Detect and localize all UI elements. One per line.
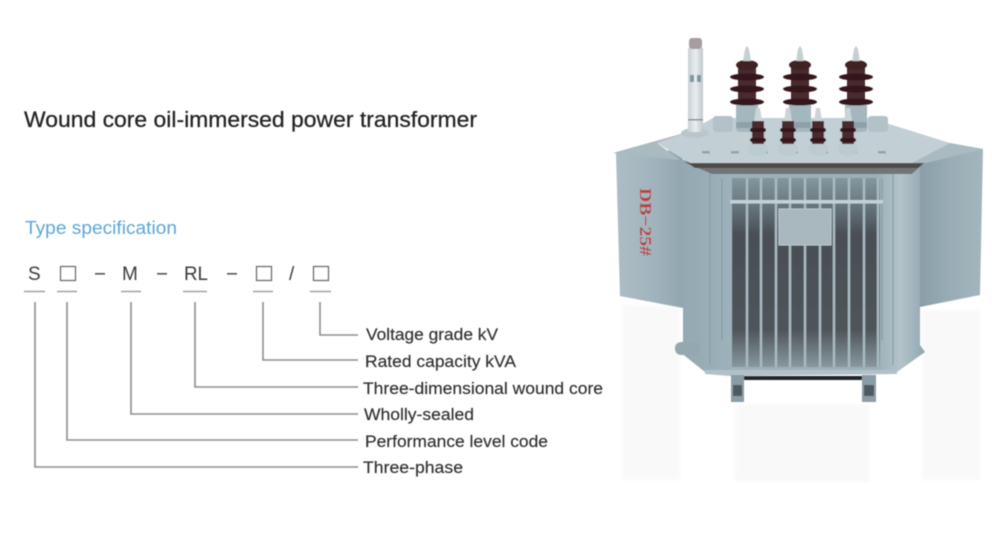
high voltage bushings — [730, 46, 764, 132]
low voltage bushings — [748, 108, 768, 156]
tank lid — [613, 118, 983, 163]
tank body — [680, 160, 925, 372]
left radiator — [616, 150, 683, 308]
transformer reflection — [622, 305, 980, 482]
illustration: oil-immersed transformer — [613, 38, 983, 402]
heading: type specification: Type specification — [25, 217, 177, 238]
code underlines — [24, 290, 331, 292]
left foot — [731, 375, 744, 402]
leader lines — [35, 302, 358, 467]
type code row: S — [28, 264, 41, 285]
leader labels: Three-dimensional wound core — [363, 379, 603, 398]
lid shadow — [684, 162, 925, 174]
type code row: / — [289, 264, 295, 285]
base skid — [705, 370, 897, 376]
tank corner lines — [710, 170, 893, 365]
drain valve — [675, 342, 700, 355]
conservator pipe — [681, 38, 709, 138]
leader labels: Voltage grade kV — [366, 325, 499, 344]
red marking DB-25: DB−25# — [636, 188, 655, 257]
leader labels: Rated capacity kVA — [365, 352, 517, 371]
nameplate — [779, 209, 831, 245]
title: Wound core oil-immersed power transformer — [24, 107, 478, 132]
leader labels: Three-phase — [363, 458, 463, 477]
right radiator — [920, 149, 983, 307]
type code row: RL — [184, 264, 208, 285]
right foot — [862, 375, 876, 402]
lid bolts — [702, 151, 886, 154]
leader labels: Performance level code — [365, 432, 548, 451]
horizontal fin bar — [730, 200, 883, 204]
leader labels: Wholly-sealed — [364, 405, 474, 424]
lid flanges — [713, 116, 733, 132]
type code row — [28, 264, 328, 285]
type code row: M — [122, 264, 138, 285]
leader labels — [363, 325, 603, 477]
radiator fins — [732, 178, 880, 367]
